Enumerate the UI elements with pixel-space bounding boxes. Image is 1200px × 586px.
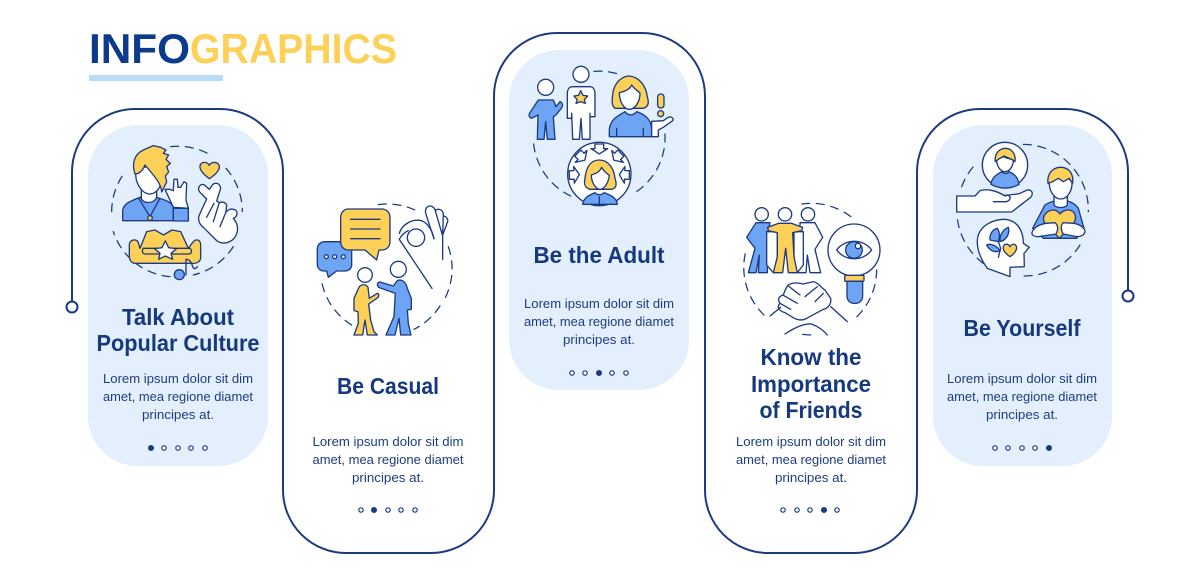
- heading: of Friends: [760, 397, 862, 423]
- title: [89, 25, 397, 72]
- heading: [751, 344, 871, 423]
- heading: Be Casual: [337, 373, 439, 399]
- heading: Importance: [751, 371, 871, 397]
- body text: principes at.: [986, 407, 1058, 422]
- body text: principes at.: [352, 470, 424, 485]
- pagination dots: [781, 508, 839, 512]
- body text: [947, 371, 1097, 422]
- body text: principes at.: [775, 470, 847, 485]
- body text: amet, mea regione diamet: [947, 389, 1097, 404]
- pagination dots: [993, 446, 1051, 450]
- heading: Be the Adult: [534, 242, 665, 268]
- body text: [312, 434, 464, 485]
- pagination dots: [359, 508, 417, 512]
- body text: [524, 296, 674, 347]
- connecting outline: [72, 33, 1128, 553]
- icon: pop culture: [112, 146, 242, 280]
- body text: amet, mea regione diamet: [312, 452, 464, 467]
- heading: Popular Culture: [96, 330, 260, 356]
- body text: [103, 371, 253, 422]
- body text: Lorem ipsum dolor sit dim: [312, 434, 464, 449]
- pagination dots: [570, 371, 628, 375]
- body text: Lorem ipsum dolor sit dim: [103, 371, 253, 386]
- outline end node: [1122, 290, 1134, 302]
- heading: Be Yourself: [964, 315, 1081, 341]
- body text: amet, mea regione diamet: [524, 314, 674, 329]
- icon: self care: [957, 142, 1088, 277]
- heading: Know the: [760, 344, 862, 370]
- icon: friends: [744, 203, 880, 335]
- pagination dots: [149, 446, 207, 450]
- body text: principes at.: [142, 407, 214, 422]
- title underline: [89, 75, 223, 81]
- outline start node: [66, 302, 78, 312]
- panel: talk about popular culture: [88, 125, 268, 466]
- heading: Talk About: [122, 304, 234, 330]
- panel: be casual: [312, 204, 464, 512]
- title: INFO: [89, 25, 190, 72]
- panel: be the adult: [509, 50, 689, 390]
- body text: [736, 434, 886, 485]
- body text: Lorem ipsum dolor sit dim: [736, 434, 886, 449]
- heading: [96, 304, 260, 356]
- body text: Lorem ipsum dolor sit dim: [947, 371, 1097, 386]
- icon: conversation: [317, 204, 452, 335]
- title: GRAPHICS: [190, 25, 397, 72]
- panel: be yourself: [933, 125, 1112, 466]
- body text: amet, mea regione diamet: [103, 389, 253, 404]
- body text: amet, mea regione diamet: [736, 452, 886, 467]
- icon: adult roles: [529, 66, 673, 206]
- body text: Lorem ipsum dolor sit dim: [524, 296, 674, 311]
- body text: principes at.: [563, 332, 635, 347]
- panel: importance of friends: [736, 203, 886, 512]
